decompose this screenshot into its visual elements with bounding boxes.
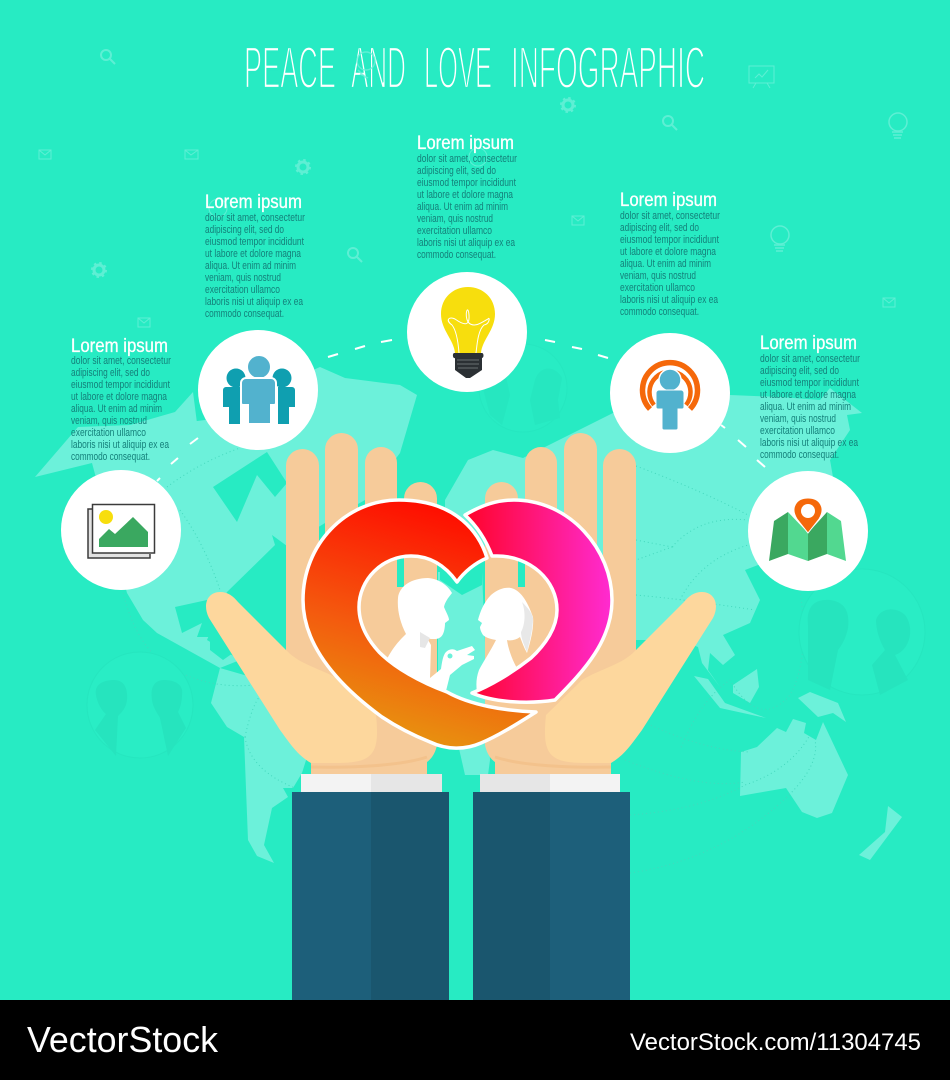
title: AND [351, 35, 406, 101]
text block 4 [620, 190, 720, 318]
dashed connector arc [157, 340, 765, 481]
text block 3: eiusmod tempor incididunt [417, 177, 516, 189]
left sleeve [292, 792, 449, 1000]
world map [35, 367, 902, 873]
text block 4: commodo consequat. [620, 306, 699, 318]
couple silhouette [380, 578, 533, 700]
heart left ribbon [303, 500, 536, 748]
text block 1: aliqua. Ut enim ad minim [71, 403, 162, 415]
right shirt cuff [480, 774, 620, 792]
text block 1: eiusmod tempor incididunt [71, 379, 170, 391]
text block 5: Lorem ipsum [760, 333, 857, 354]
text block 3: exercitation ullamco [417, 225, 492, 237]
text block 4: dolor sit amet, consectetur [620, 210, 720, 222]
text block 4: adipiscing elit, sed do [620, 222, 699, 234]
right sleeve [473, 792, 630, 1000]
heart ribbon [303, 500, 612, 748]
icon circle: broadcasting person [610, 333, 730, 453]
text block 1: Lorem ipsum [71, 336, 168, 357]
text block 1: adipiscing elit, sed do [71, 367, 150, 379]
text block 3: laboris nisi ut aliquip ex ea [417, 237, 516, 249]
text block 4: laboris nisi ut aliquip ex ea [620, 294, 719, 306]
text block 2: veniam, quis nostrud [205, 272, 281, 284]
text block 5 [760, 333, 860, 461]
text block 4: veniam, quis nostrud [620, 270, 696, 282]
text block 1: veniam, quis nostrud [71, 415, 147, 427]
icon circle: team [198, 330, 318, 450]
footer bar [0, 1000, 950, 1080]
text block 1: commodo consequat. [71, 451, 150, 463]
text block 5: dolor sit amet, consectetur [760, 353, 860, 365]
text block 5: laboris nisi ut aliquip ex ea [760, 437, 859, 449]
text block 4: exercitation ullamco [620, 282, 695, 294]
text block 2: aliqua. Ut enim ad minim [205, 260, 296, 272]
text block 1: laboris nisi ut aliquip ex ea [71, 439, 170, 451]
text block 3: ut labore et dolore magna [417, 189, 514, 201]
text block 2: dolor sit amet, consectetur [205, 212, 305, 224]
text block 5: commodo consequat. [760, 449, 839, 461]
icon circle: image [61, 470, 181, 590]
footer bar: VectorStock [27, 1019, 219, 1060]
text block 3: commodo consequat. [417, 249, 496, 261]
text block 2: adipiscing elit, sed do [205, 224, 284, 236]
title: LOVE [424, 35, 492, 101]
footer bar: VectorStock.com/11304745 [630, 1029, 921, 1056]
heart right ribbon [465, 500, 612, 702]
text block 4: Lorem ipsum [620, 190, 717, 211]
text: INFOGRAPHIC [511, 35, 705, 101]
left shirt cuff [301, 774, 442, 792]
text block 2: laboris nisi ut aliquip ex ea [205, 296, 304, 308]
text block 1: ut labore et dolore magna [71, 391, 168, 403]
right hand [485, 433, 716, 774]
text block 5: veniam, quis nostrud [760, 413, 836, 425]
text block 1: dolor sit amet, consectetur [71, 355, 171, 367]
faint globes with couples [87, 344, 925, 758]
text block 3: veniam, quis nostrud [417, 213, 493, 225]
text block 4: ut labore et dolore magna [620, 246, 717, 258]
text block 4: aliqua. Ut enim ad minim [620, 258, 711, 270]
title [244, 35, 705, 101]
background icons [39, 50, 907, 327]
text block 3 [417, 133, 517, 261]
text block 2 [205, 192, 305, 320]
text block 5: adipiscing elit, sed do [760, 365, 839, 377]
text block 1: exercitation ullamco [71, 427, 146, 439]
text block 5: ut labore et dolore magna [760, 389, 857, 401]
text block 1 [71, 336, 171, 463]
text block 5: aliqua. Ut enim ad minim [760, 401, 851, 413]
text block 3: adipiscing elit, sed do [417, 165, 496, 177]
text block 3: Lorem ipsum [417, 133, 514, 154]
text block 3: aliqua. Ut enim ad minim [417, 201, 508, 213]
text block 4: eiusmod tempor incididunt [620, 234, 719, 246]
text block 2: exercitation ullamco [205, 284, 280, 296]
woman [476, 588, 533, 700]
left hand [206, 433, 437, 774]
text block 5: exercitation ullamco [760, 425, 835, 437]
text block 5: eiusmod tempor incididunt [760, 377, 859, 389]
text block 2: ut labore et dolore magna [205, 248, 302, 260]
icon circle: map pin [748, 471, 868, 591]
text block 3: dolor sit amet, consectetur [417, 153, 517, 165]
icon circle: light bulb [407, 272, 527, 392]
text block 2: commodo consequat. [205, 308, 284, 320]
title: PEACE [244, 35, 336, 101]
text block 2: eiusmod tempor incididunt [205, 236, 304, 248]
man [380, 578, 475, 695]
text block 2: Lorem ipsum [205, 192, 302, 213]
